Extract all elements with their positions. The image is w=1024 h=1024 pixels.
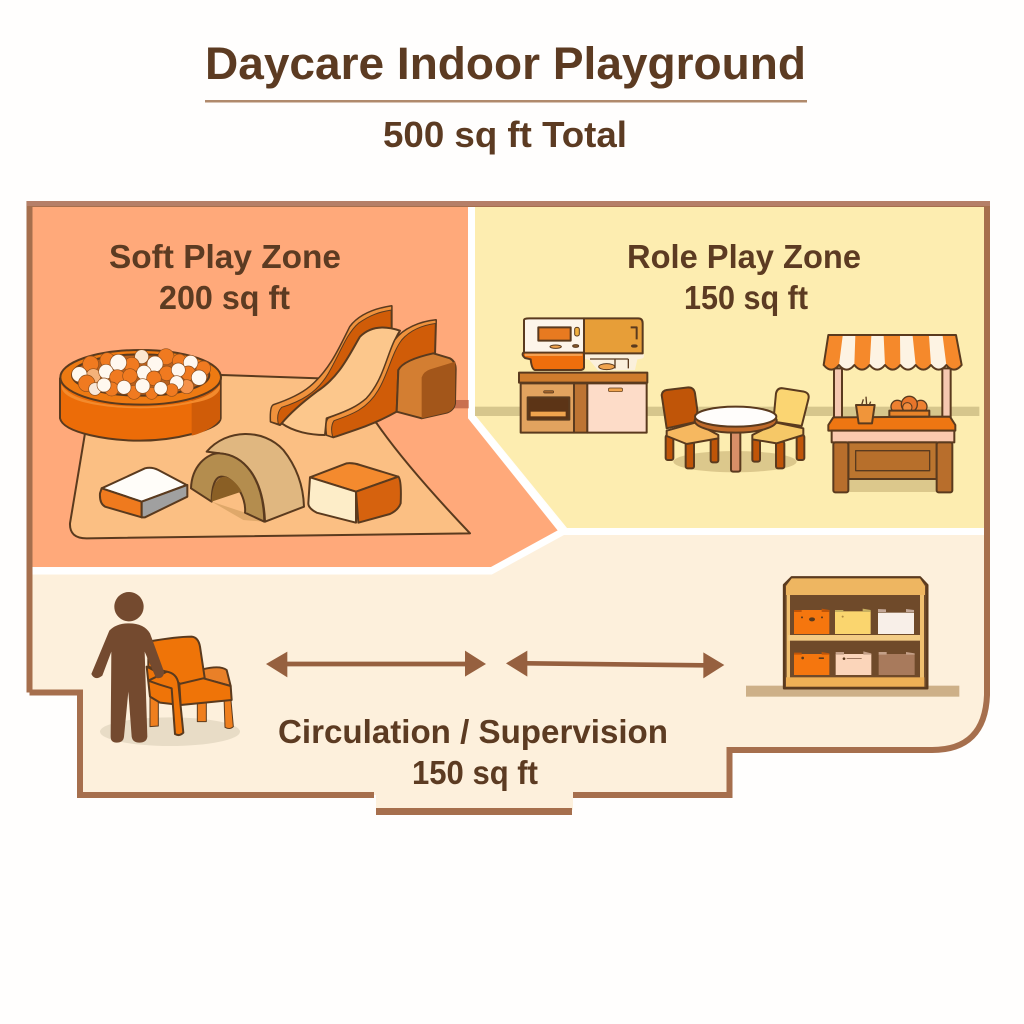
- panel: role play zone: [475, 204, 984, 528]
- storage bins: [794, 609, 915, 675]
- subtitle: total area: 500 sq ft Total: [383, 114, 627, 155]
- heading: soft play zone: 200 sq ft: [159, 279, 290, 316]
- illustration: role play furniture: [475, 318, 979, 492]
- icon: table and chairs: [662, 387, 809, 472]
- cup: [856, 397, 875, 423]
- panel: circulation floor: [30, 532, 986, 810]
- play mat: [70, 375, 470, 538]
- icon: ball pit: [60, 349, 221, 441]
- counter: [828, 417, 955, 431]
- icon: market stall: [824, 335, 962, 492]
- awning: [824, 335, 962, 370]
- icon: white foam block: [100, 468, 187, 517]
- arrow: left double-headed: [266, 651, 486, 677]
- arrows: circulation paths: [266, 651, 724, 678]
- arrow: right double-headed: [506, 651, 724, 678]
- heading: role play zone: 150 sq ft: [684, 279, 808, 316]
- icon: slide: [271, 306, 456, 437]
- panel: soft play zone: [30, 204, 560, 567]
- heading: soft play zone: Soft Play Zone: [109, 238, 341, 275]
- icon: armchair: [147, 637, 233, 735]
- title: Daycare Indoor Playground: [205, 38, 806, 89]
- heading: circulation and supervision: 150 sq ft: [412, 754, 538, 791]
- heading: soft play zone: [109, 238, 341, 316]
- illustration: supervisor with armchair: [91, 592, 240, 746]
- icon: orange foam block: [308, 463, 401, 523]
- illustration: storage shelf: [746, 577, 959, 697]
- heading: circulation and supervision: [278, 713, 668, 791]
- icon: adult figure: [91, 592, 164, 743]
- heading: role play zone: Role Play Zone: [627, 238, 861, 275]
- chair: right: [752, 388, 809, 468]
- heading: role play zone: [627, 238, 861, 316]
- icon: play kitchen: [519, 318, 647, 433]
- icon: tunnel arch: [191, 434, 304, 522]
- illustration: soft play equipment: [60, 306, 470, 538]
- floor plan outline: [27, 204, 990, 812]
- chair: left: [662, 387, 718, 468]
- fruit crate: [889, 396, 929, 417]
- heading: circulation and supervision: Circulation / Supervision: [278, 713, 668, 750]
